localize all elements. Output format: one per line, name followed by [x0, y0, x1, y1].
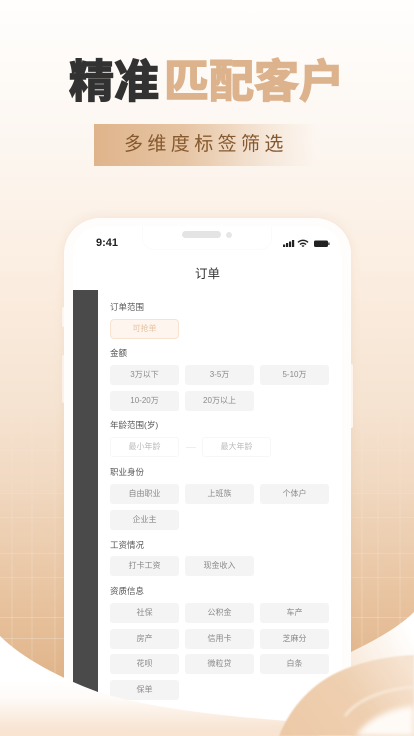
- notch: [142, 226, 272, 250]
- chip: 花呗: [136, 659, 152, 668]
- cream wave: [0, 636, 320, 736]
- chip: [110, 629, 179, 649]
- chip: [260, 365, 329, 385]
- ring light streak: [345, 687, 414, 716]
- side button: [351, 364, 353, 428]
- side button: [62, 307, 64, 327]
- ring inner highlight: [356, 706, 414, 736]
- label: 金额: [110, 348, 127, 358]
- cream swoosh foreground: [0, 612, 414, 736]
- chip: [110, 484, 179, 504]
- chip: 保单: [136, 685, 152, 694]
- subtitle text: 多维度标签筛选: [124, 134, 288, 155]
- icon: wifi: [298, 240, 308, 246]
- chip: 白条: [286, 659, 302, 668]
- chip: 公积金: [208, 608, 232, 617]
- chip: 5-10万: [282, 370, 306, 379]
- input: max age: [202, 437, 271, 457]
- section: amount: [110, 348, 329, 411]
- label: 工资情况: [110, 540, 144, 550]
- chip: 现金收入: [204, 561, 236, 570]
- chip: [185, 603, 254, 623]
- label: 资质信息: [110, 586, 144, 596]
- chip: 自由职业: [128, 489, 160, 498]
- notch camera: [226, 232, 232, 238]
- icon: signal: [283, 240, 294, 247]
- chip: 车产: [286, 608, 302, 617]
- cream ring: [279, 655, 414, 736]
- label: 订单范围: [110, 302, 144, 312]
- chip: [110, 510, 179, 530]
- chip: 打卡工资: [128, 561, 160, 570]
- chip: [110, 365, 179, 385]
- chip: [260, 629, 329, 649]
- chip: [260, 484, 329, 504]
- input: max age: 最大年龄: [220, 442, 252, 451]
- chip: 3万以下: [130, 370, 159, 379]
- chip: [110, 391, 179, 411]
- input: min age: 最小年龄: [128, 442, 160, 451]
- section: order scope: [110, 302, 179, 339]
- label: 年龄范围(岁): [110, 420, 158, 430]
- chip: 企业主: [132, 515, 156, 524]
- chip: 房产: [136, 634, 152, 643]
- chip: 上班族: [208, 489, 232, 498]
- chip: [185, 556, 254, 576]
- title dark part: 精准: [69, 56, 159, 107]
- chip: 3-5万: [210, 370, 229, 379]
- dark sidebar: [73, 290, 98, 702]
- notch speaker: [182, 231, 221, 238]
- chip: [110, 680, 179, 700]
- chip: [110, 654, 179, 674]
- chip: 个体户: [282, 489, 306, 498]
- side button: [62, 355, 64, 403]
- phone frame: [64, 218, 351, 736]
- input: min age: [110, 437, 179, 457]
- chip: [260, 603, 329, 623]
- status icons: [283, 240, 330, 247]
- dash: [186, 447, 196, 448]
- chip: 社保: [136, 608, 152, 617]
- screen heading: 订单: [195, 267, 220, 281]
- chip: 20万以上: [203, 396, 236, 405]
- section: salary: [110, 540, 254, 576]
- chip: 信用卡: [208, 634, 232, 643]
- section: qualifications: [110, 586, 329, 700]
- chip: 微粒贷: [208, 659, 232, 668]
- chip: [110, 603, 179, 623]
- chip: [185, 654, 254, 674]
- chip: 10-20万: [130, 396, 159, 405]
- chip: [260, 654, 329, 674]
- cream right rise: [351, 612, 414, 736]
- chip: 可抢单: [132, 324, 156, 333]
- section: occupation: [110, 467, 329, 530]
- chip: 芝麻分: [282, 634, 306, 643]
- phone screen: [73, 226, 342, 736]
- status bar time: 9:41: [96, 237, 118, 249]
- chip: [185, 391, 254, 411]
- chip: [185, 484, 254, 504]
- subtitle banner: [94, 124, 316, 166]
- chip: [185, 629, 254, 649]
- section: age range: [110, 420, 252, 451]
- title: [68, 56, 344, 107]
- chip: [110, 556, 179, 576]
- title gold part: 匹配客户: [164, 56, 344, 107]
- label: 职业身份: [110, 467, 144, 477]
- chip: [110, 319, 179, 339]
- icon: battery: [314, 240, 330, 247]
- chip: [185, 365, 254, 385]
